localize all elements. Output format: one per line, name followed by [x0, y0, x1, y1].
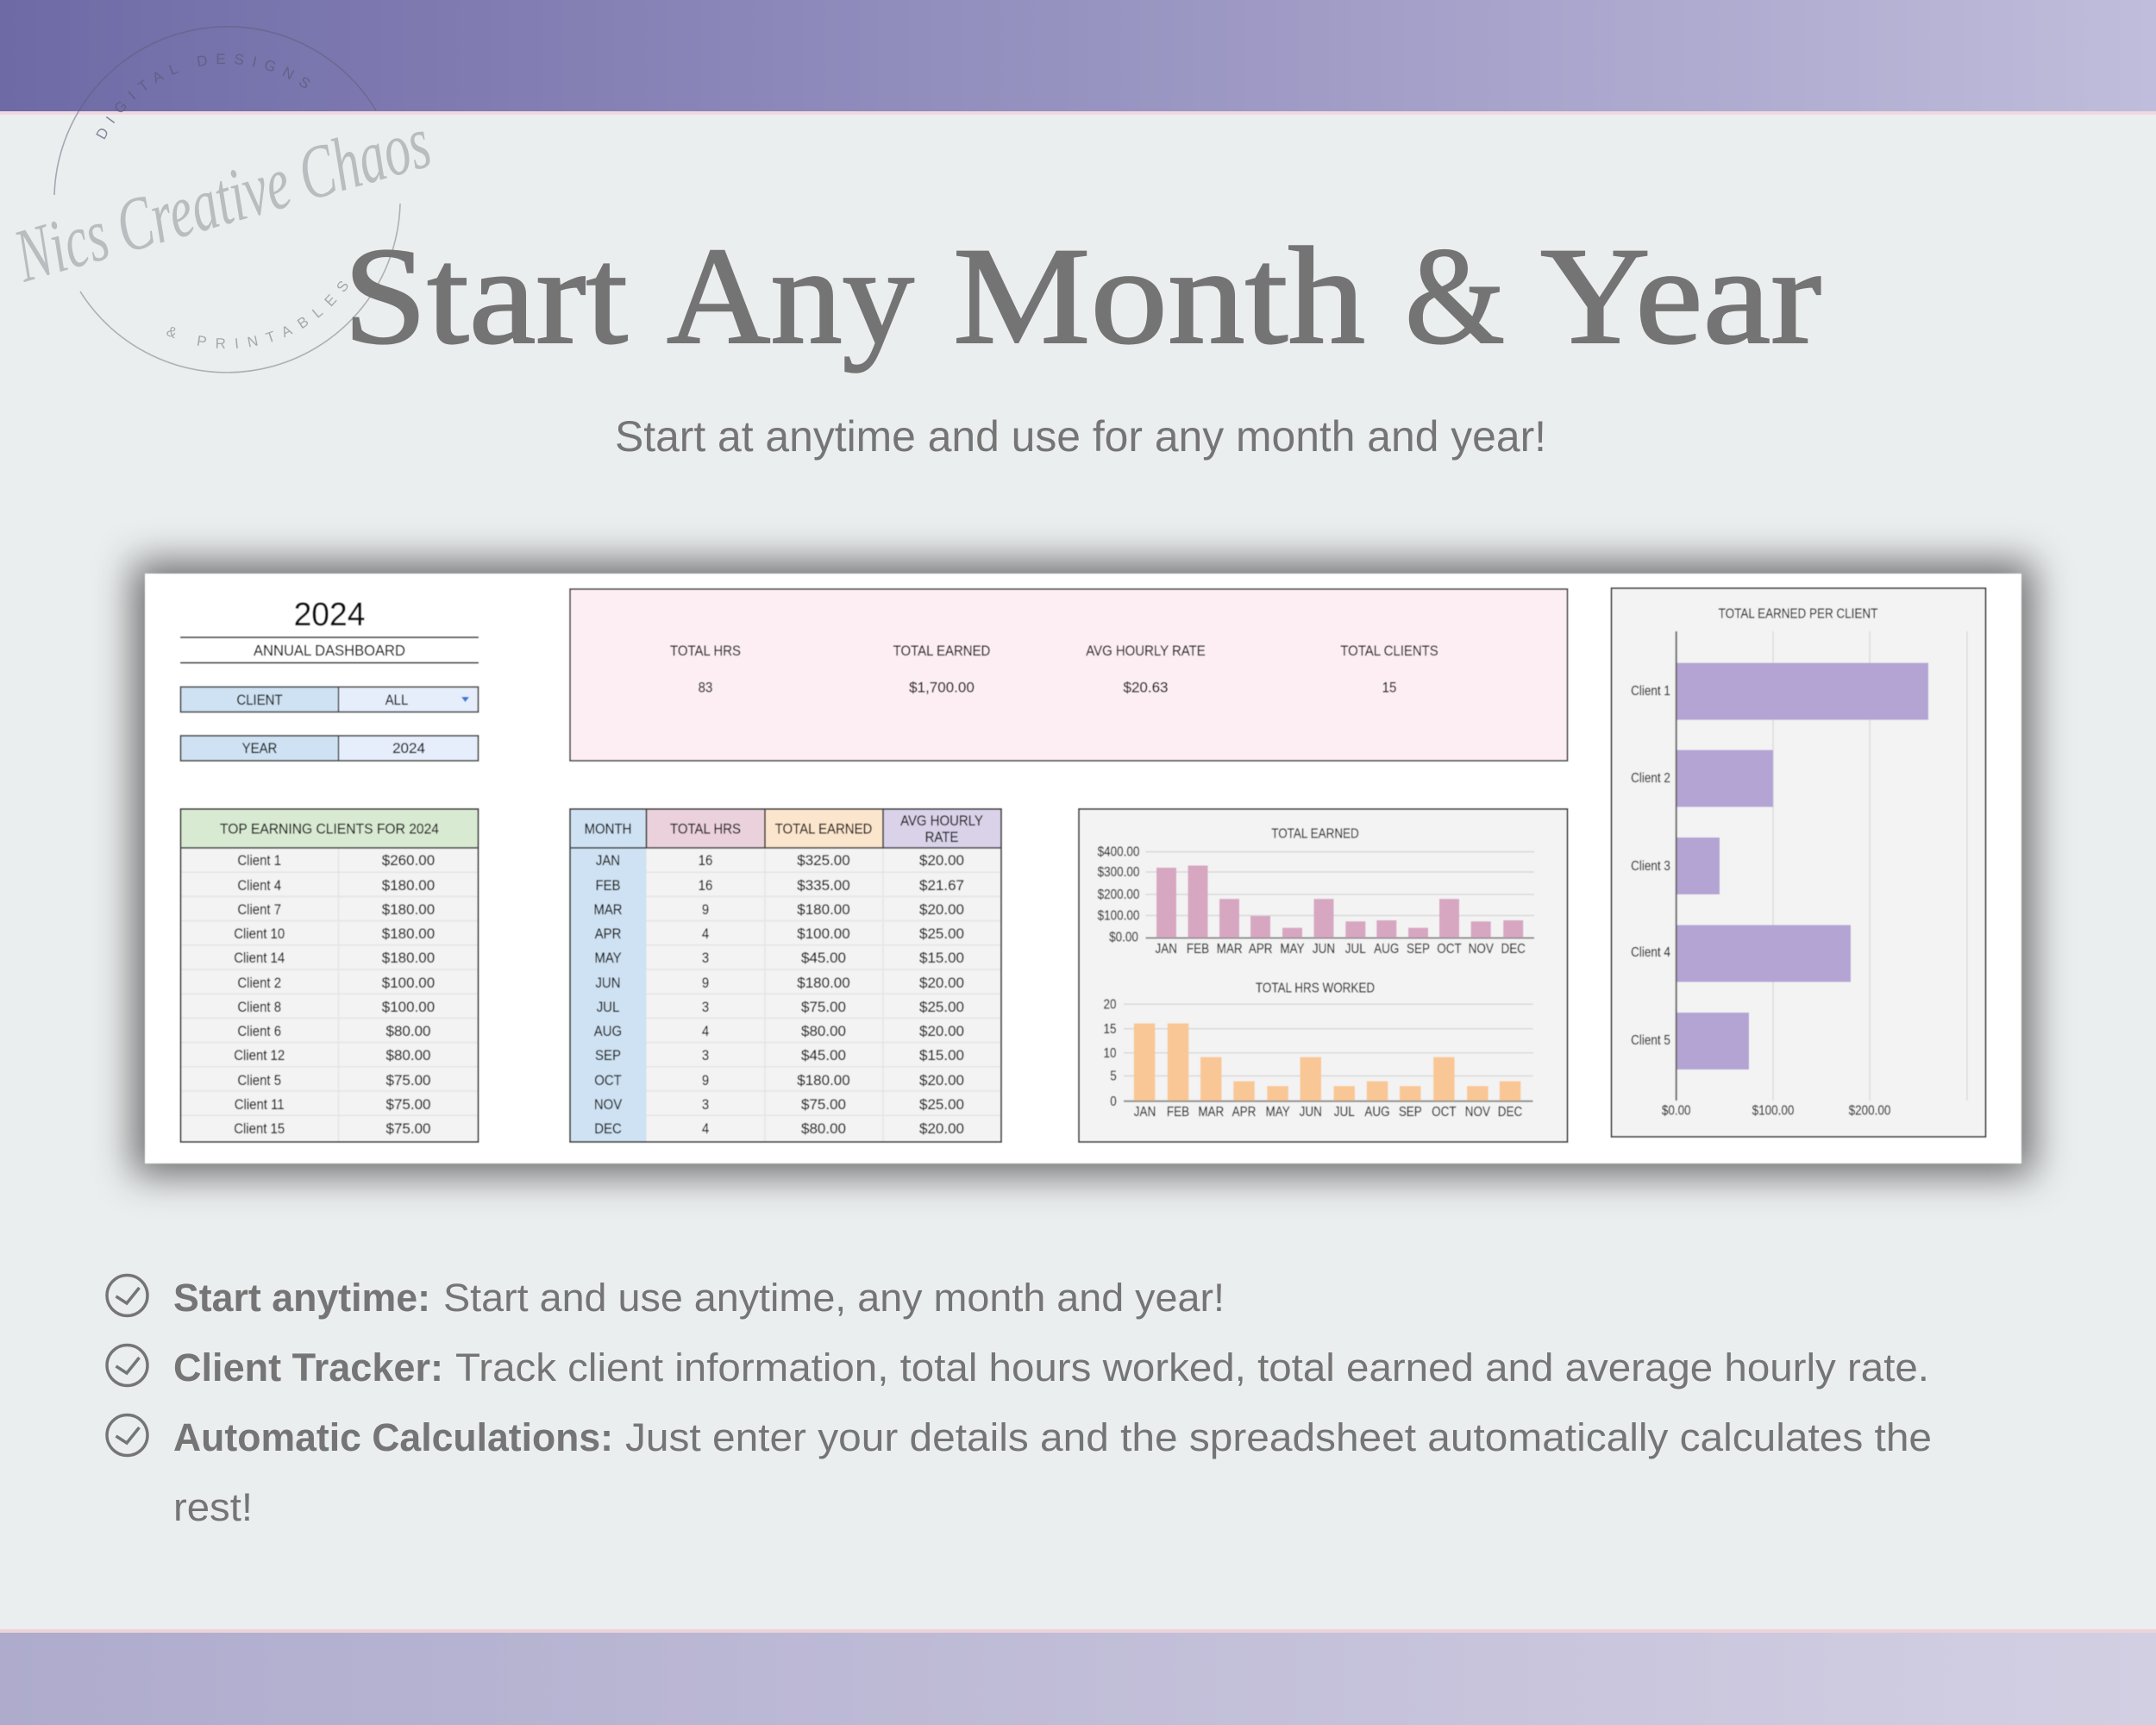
bar chart: total earned: TOTAL EARNED: [1271, 827, 1359, 842]
table: top earning clients: $180.00: [382, 877, 435, 894]
bullet: client tracker: Client Tracker:: [173, 1346, 443, 1389]
bullet: client tracker: Track client information, total hours worked, total earned and average hourly rate.: [455, 1346, 1929, 1389]
table: monthly totals: $335.00: [797, 877, 850, 894]
bar chart: total earned: $100.00: [1098, 909, 1139, 924]
table: monthly totals: AVG HOURLY: [900, 813, 983, 829]
table: monthly totals: $80.00: [801, 1120, 846, 1137]
dashboard heading: [180, 596, 479, 664]
bar chart: total hours worked: JUL: [1334, 1105, 1355, 1120]
table: top earning clients: $260.00: [382, 852, 435, 869]
panel: total earned per client bar chart: [1611, 588, 1985, 1137]
panel: totals summary: $1,700.00: [909, 680, 975, 695]
panel: totals summary: TOTAL EARNED: [893, 643, 990, 659]
bar chart: total earned: [1098, 827, 1534, 957]
panel: totals summary: 83: [699, 681, 712, 696]
panel: total earned per client bar chart: Client 3: [1631, 859, 1670, 874]
bar chart: total hours worked: [1104, 982, 1533, 1120]
table: monthly totals: TOTAL HRS: [670, 822, 741, 837]
panel: totals summary: AVG HOURLY RATE: [1086, 643, 1206, 659]
table: monthly totals: OCT: [594, 1073, 622, 1088]
subtitle: Start at anytime and use for any month and year!: [615, 412, 1546, 461]
panel: total earned per client bar chart: Client 4: [1631, 945, 1670, 960]
bottom gradient band: [0, 1629, 2156, 1725]
table: top earning clients: [181, 809, 478, 1142]
table: monthly totals: JAN: [596, 853, 620, 869]
table: monthly totals: 9: [702, 975, 709, 991]
bar chart: total hours worked: OCT: [1432, 1105, 1457, 1120]
bullet: automatic calculations: [107, 1414, 1932, 1529]
client selector: CLIENT: [236, 693, 283, 708]
bar chart: total earned: JAN: [1156, 942, 1177, 957]
table: top earning clients: Client 5: [237, 1073, 281, 1088]
bullet: start anytime: Start anytime:: [173, 1276, 430, 1320]
bar chart: total hours worked: DEC: [1498, 1105, 1522, 1120]
table: monthly totals: 4: [702, 1121, 709, 1137]
table: top earning clients: $100.00: [382, 999, 435, 1015]
dashboard heading: ANNUAL DASHBOARD: [254, 641, 405, 659]
dashboard heading: 2024: [294, 596, 365, 632]
table: top earning clients: $75.00: [386, 1120, 431, 1137]
bullet list: features: [107, 1275, 1932, 1529]
table: monthly totals: $20.00: [919, 852, 964, 869]
table: top earning clients: Client 2: [237, 975, 281, 991]
table: monthly totals: $80.00: [801, 1023, 846, 1039]
panel: monthly charts: [1079, 809, 1568, 1142]
table: monthly totals: 3: [702, 1048, 709, 1063]
bar chart: total earned: SEP: [1407, 942, 1430, 957]
title: [343, 219, 1821, 373]
table: monthly totals: RATE: [925, 830, 958, 845]
table: monthly totals: $180.00: [797, 975, 850, 991]
logo watermark: & PRINTABLES: [166, 281, 348, 348]
table: monthly totals: 16: [699, 853, 712, 869]
logo watermark: DIGITAL DESIGNS: [96, 53, 310, 140]
table: monthly totals: [570, 809, 1001, 1142]
table: monthly totals: $45.00: [801, 1047, 846, 1063]
spreadsheet shadow: [133, 561, 2034, 1176]
table: top earning clients: $180.00: [382, 901, 435, 918]
table: top earning clients: Client 15: [234, 1121, 285, 1137]
bullet: automatic calculations: rest!: [173, 1485, 253, 1529]
bar chart: total earned: JUN: [1313, 942, 1335, 957]
table: monthly totals: 9: [702, 902, 709, 918]
bar chart: total hours worked: 5: [1110, 1070, 1117, 1084]
table: top earning clients: Client 7: [237, 902, 281, 918]
table: monthly totals: $20.00: [919, 1023, 964, 1039]
table: top earning clients: $75.00: [386, 1096, 431, 1113]
bar chart: total hours worked: MAY: [1266, 1105, 1290, 1120]
bullet: automatic calculations: Just enter your details and the spreadsheet automatically calculates the: [625, 1415, 1932, 1459]
client selector: [181, 687, 478, 712]
table: monthly totals: $180.00: [797, 1072, 850, 1088]
bar chart: total hours worked: 10: [1104, 1046, 1116, 1061]
table: top earning clients: TOP EARNING CLIENTS FOR 2024: [220, 821, 439, 837]
bar chart: total hours worked: MAR: [1198, 1105, 1224, 1120]
bar chart: total hours worked: APR: [1232, 1105, 1256, 1120]
table: monthly totals: 3: [702, 1097, 709, 1113]
bar chart: total earned: $300.00: [1098, 865, 1139, 880]
panel: total earned per client bar chart: TOTAL EARNED PER CLIENT: [1719, 607, 1877, 622]
table: monthly totals: 9: [702, 1073, 709, 1088]
bar chart: total earned: MAY: [1280, 942, 1305, 957]
table: monthly totals: $45.00: [801, 950, 846, 966]
table: monthly totals: SEP: [595, 1048, 621, 1063]
bar chart: total hours worked: NOV: [1465, 1105, 1490, 1120]
bar chart: total hours worked: SEP: [1399, 1105, 1422, 1120]
panel: total earned per client bar chart: Client 5: [1631, 1033, 1670, 1048]
bar chart: total earned: MAR: [1217, 942, 1243, 957]
bar chart: total hours worked: TOTAL HRS WORKED: [1256, 982, 1375, 996]
table: top earning clients: $100.00: [382, 975, 435, 991]
panel: total earned per client bar chart: $0.00: [1662, 1104, 1691, 1119]
table: top earning clients: Client 6: [237, 1024, 281, 1039]
panel: totals summary: TOTAL HRS: [670, 643, 741, 659]
title: &: [1405, 219, 1505, 373]
panel: total earned per client bar chart: Client 1: [1631, 684, 1670, 699]
title: Start: [343, 219, 628, 373]
table: top earning clients: $80.00: [386, 1047, 431, 1063]
logo watermark: [5, 26, 439, 373]
table: monthly totals: $25.00: [919, 925, 964, 942]
table: monthly totals: $20.00: [919, 1072, 964, 1088]
table: monthly totals: $21.67: [919, 877, 964, 894]
bar chart: total earned: OCT: [1437, 942, 1462, 957]
title: Year: [1540, 219, 1821, 373]
table: monthly totals: $75.00: [801, 999, 846, 1015]
table: monthly totals: AUG: [594, 1024, 622, 1039]
bullet: start anytime: Start and use anytime, any month and year!: [443, 1276, 1225, 1320]
bar chart: total hours worked: FEB: [1167, 1105, 1189, 1120]
table: top earning clients: $75.00: [386, 1072, 431, 1088]
table: monthly totals: TOTAL EARNED: [775, 822, 872, 837]
table: top earning clients: $180.00: [382, 950, 435, 966]
bullet: start anytime: [107, 1275, 1225, 1320]
table: monthly totals: $325.00: [797, 852, 850, 869]
table: monthly totals: $20.00: [919, 975, 964, 991]
bar chart: total hours worked: 0: [1110, 1095, 1117, 1109]
bar chart: total hours worked: 20: [1104, 998, 1116, 1013]
table: monthly totals: MONTH: [585, 822, 631, 837]
table: top earning clients: Client 1: [237, 853, 281, 869]
table: monthly totals: FEB: [595, 878, 621, 894]
panel: totals summary: $20.63: [1123, 680, 1168, 695]
bar chart: total hours worked: 15: [1104, 1022, 1116, 1037]
table: monthly totals: 3: [702, 950, 709, 966]
spreadsheet dashboard screenshot: [145, 574, 2021, 1164]
bar chart: total earned: $0.00: [1109, 931, 1138, 945]
title: Any: [667, 219, 914, 373]
bar chart: total hours worked: JUN: [1300, 1105, 1322, 1120]
table: monthly totals: DEC: [594, 1121, 622, 1137]
table: monthly totals: $100.00: [797, 925, 850, 942]
bar chart: total earned: AUG: [1374, 942, 1399, 957]
year selector: 2024: [392, 740, 425, 756]
bar chart: total earned: DEC: [1501, 942, 1526, 957]
client selector: ALL: [385, 693, 408, 708]
panel: total earned per client bar chart: Client 2: [1631, 771, 1670, 786]
bar chart: total earned: APR: [1249, 942, 1273, 957]
year selector: [181, 736, 478, 761]
table: monthly totals: APR: [595, 926, 621, 942]
logo watermark: Nics Creative Chaos: [5, 101, 439, 298]
bar chart: total earned: $200.00: [1098, 888, 1139, 902]
table: monthly totals: NOV: [594, 1097, 623, 1113]
bar chart: total earned: NOV: [1469, 942, 1494, 957]
table: top earning clients: $180.00: [382, 925, 435, 942]
table: top earning clients: Client 10: [234, 926, 285, 942]
table: monthly totals: MAR: [593, 902, 623, 918]
table: top earning clients: Client 11: [235, 1097, 285, 1113]
table: monthly totals: $15.00: [919, 1047, 964, 1063]
table: monthly totals: 4: [702, 926, 709, 942]
table: top earning clients: Client 14: [234, 950, 285, 966]
panel: totals summary: TOTAL CLIENTS: [1340, 643, 1438, 659]
table: monthly totals: $75.00: [801, 1096, 846, 1113]
table: top earning clients: $80.00: [386, 1023, 431, 1039]
table: monthly totals: $20.00: [919, 901, 964, 918]
title: Month: [953, 219, 1365, 373]
table: monthly totals: 16: [699, 878, 712, 894]
panel: total earned per client bar chart: $200.00: [1849, 1104, 1890, 1119]
bar chart: total earned: $400.00: [1098, 845, 1139, 860]
table: top earning clients: Client 8: [237, 1000, 281, 1015]
table: monthly totals: 3: [702, 1000, 709, 1015]
table: monthly totals: JUL: [597, 1000, 619, 1015]
bar chart: total earned: JUL: [1345, 942, 1366, 957]
table: monthly totals: $180.00: [797, 901, 850, 918]
table: monthly totals: $25.00: [919, 999, 964, 1015]
top gradient band: [0, 0, 2156, 115]
year selector: YEAR: [242, 741, 277, 756]
table: monthly totals: 4: [702, 1024, 709, 1039]
table: monthly totals: $15.00: [919, 950, 964, 966]
table: monthly totals: $25.00: [919, 1096, 964, 1113]
bar chart: total hours worked: JAN: [1134, 1105, 1156, 1120]
table: monthly totals: $20.00: [919, 1120, 964, 1137]
panel: totals summary: [570, 589, 1568, 761]
panel: totals summary: 15: [1382, 681, 1396, 696]
bullet: automatic calculations: Automatic Calculations:: [173, 1415, 613, 1459]
table: monthly totals: MAY: [594, 950, 622, 966]
panel: total earned per client bar chart: $100.00: [1752, 1104, 1794, 1119]
bar chart: total hours worked: AUG: [1364, 1105, 1390, 1120]
table: top earning clients: Client 12: [234, 1048, 285, 1063]
table: top earning clients: Client 4: [237, 878, 281, 894]
table: monthly totals: JUN: [595, 975, 621, 991]
bar chart: total earned: FEB: [1187, 942, 1209, 957]
